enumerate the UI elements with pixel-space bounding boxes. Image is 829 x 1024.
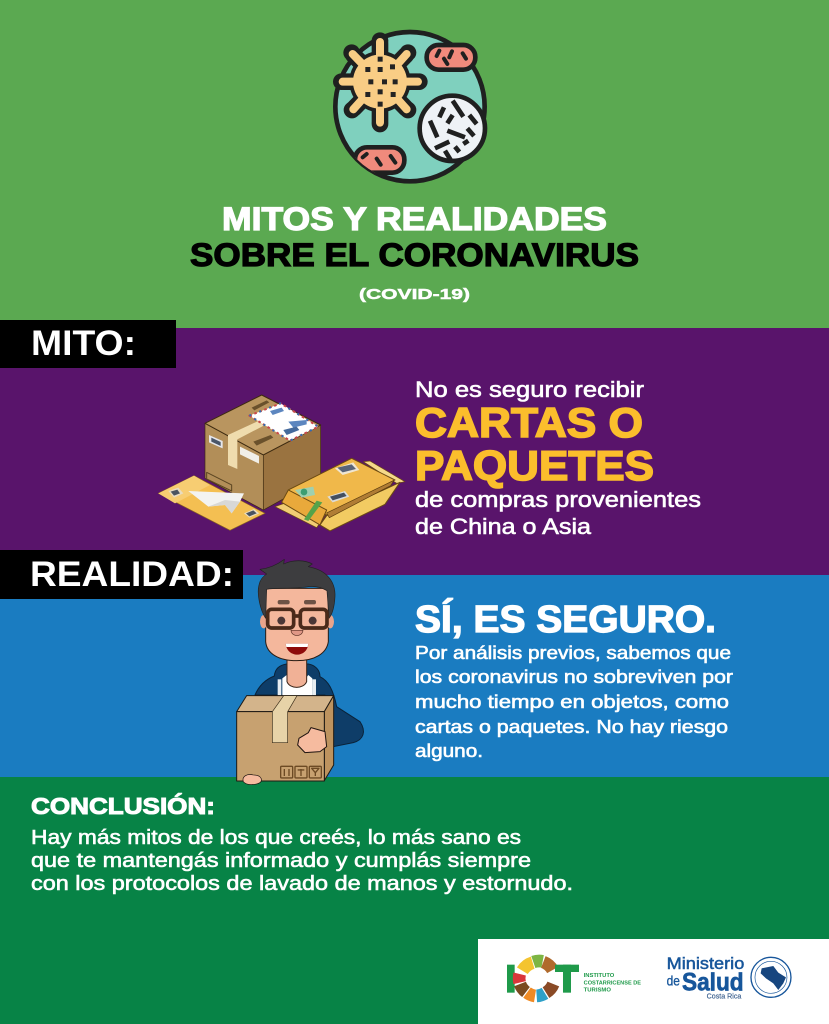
- reality text: alguno.: [415, 741, 483, 761]
- glasses: [268, 609, 327, 628]
- panel: myth: [0, 328, 829, 575]
- paper plane: [188, 491, 244, 513]
- label: MITO: MITO:: [31, 324, 136, 363]
- airmail envelope: [249, 403, 318, 441]
- hair: [258, 559, 335, 618]
- reality text: cartas o paquetes. No hay riesgo: [415, 717, 728, 737]
- title line 2: SOBRE EL CORONAVIRUS: [190, 237, 639, 273]
- icon: virus and bacteria circle: [333, 32, 485, 181]
- logo: Ministerio de Salud: Costa Rica: [707, 992, 742, 1001]
- padded envelope: [275, 458, 405, 531]
- label: REALIDAD: REALIDAD:: [30, 555, 234, 594]
- myth text: PAQUETES: [415, 442, 654, 489]
- panel: conclusion: [0, 777, 829, 1024]
- panel: title header: [0, 0, 829, 328]
- reality text: [415, 597, 733, 761]
- title line 1: MITOS Y REALIDADES: [222, 201, 607, 237]
- logo: Ministerio de Salud: Salud: [682, 969, 744, 996]
- head: [266, 588, 328, 661]
- myth text: No es seguro recibir: [415, 377, 644, 402]
- panel: reality: [0, 575, 829, 777]
- conclusion text: con los protocolos de lavado de manos y estornudo.: [31, 873, 573, 895]
- conclusion text: [31, 827, 573, 895]
- subtitle: (COVID-19): [359, 286, 470, 303]
- hands: [298, 728, 327, 753]
- logo: ICT: TURISMO: [584, 988, 611, 994]
- myth text: de compras provenientes: [415, 487, 701, 512]
- illustration: man with glasses holding a box: [237, 559, 363, 785]
- myth text: de China o Asia: [415, 514, 592, 539]
- box: [237, 696, 334, 712]
- conclusion text: Hay más mitos de los que creés, lo más sano es: [31, 827, 521, 849]
- myth text: [415, 377, 701, 539]
- panel: logos: [478, 939, 829, 1024]
- logo: ICT: [507, 961, 642, 996]
- reality text: mucho tiempo en objetos, como: [415, 692, 729, 712]
- reality text: SÍ, ES SEGURO.: [415, 597, 716, 641]
- logo: Ministerio de Salud: [667, 954, 791, 1001]
- reality text: los coronavirus no sobreviven por: [415, 667, 733, 687]
- reality text: Por análisis previos, sabemos que: [415, 643, 731, 663]
- myth text: CARTAS O: [415, 399, 643, 446]
- conclusion heading: CONCLUSIÓN:: [31, 792, 215, 819]
- illustration: box, envelopes and packages: [158, 395, 405, 531]
- logo: Ministerio de Salud: Ministerio: [667, 954, 744, 973]
- logo: ICT: COSTARRICENSE DE: [584, 980, 642, 986]
- conclusion text: que te mantengás informado y cumplás siempre: [31, 850, 531, 872]
- label: MITO: [0, 320, 176, 368]
- label: REALIDAD: [0, 550, 243, 599]
- logo: ICT: INSTITUTO: [584, 973, 614, 979]
- logo: Ministerio de Salud: de: [667, 973, 680, 989]
